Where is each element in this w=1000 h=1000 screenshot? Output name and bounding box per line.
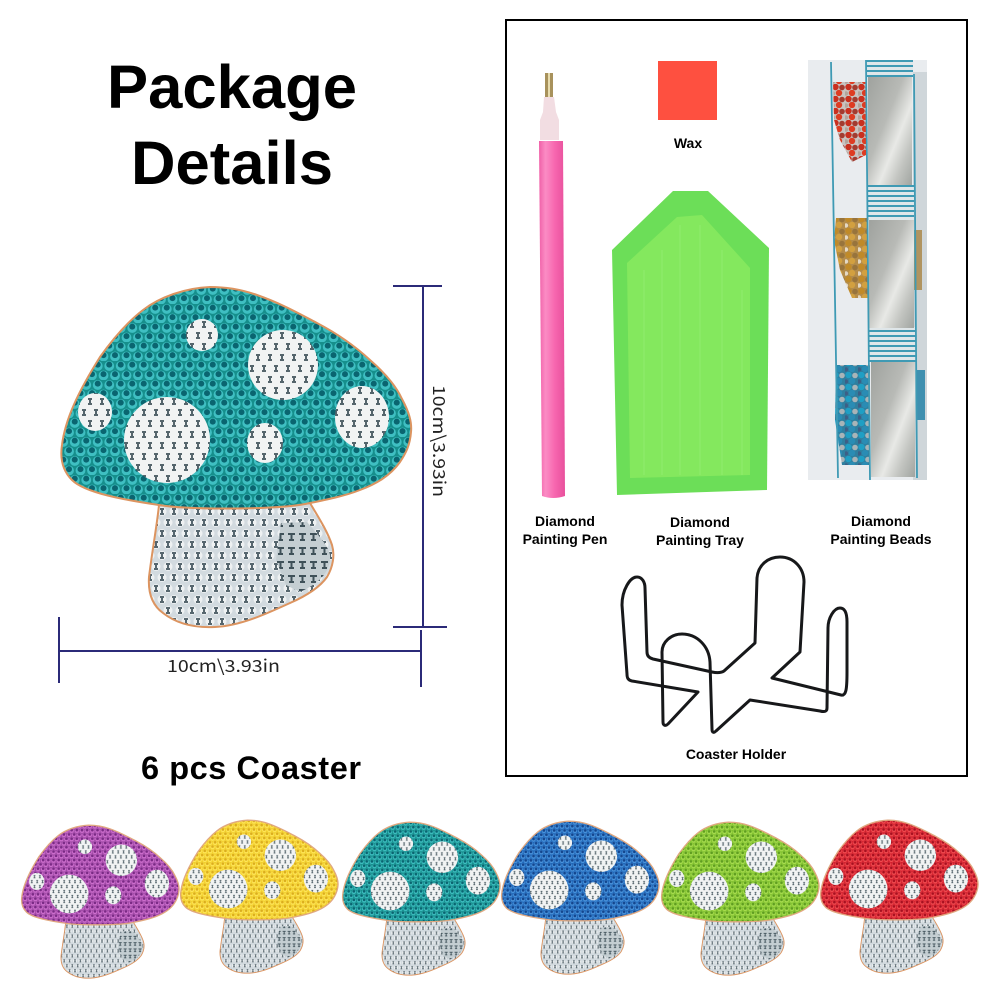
purple coaster bbox=[22, 825, 179, 978]
tray label: Painting Tray bbox=[656, 532, 744, 548]
title: Package bbox=[107, 53, 357, 122]
beads label bbox=[830, 513, 932, 547]
diamond painting pen bbox=[539, 73, 565, 498]
diamond painting tray bbox=[612, 191, 769, 495]
coaster holder bbox=[622, 557, 847, 732]
blue coaster bbox=[502, 821, 659, 974]
coaster row bbox=[22, 820, 978, 978]
tray label: Diamond bbox=[670, 514, 730, 530]
green coaster bbox=[662, 822, 819, 975]
height dimension bbox=[393, 286, 453, 627]
height dimension: 10cm\3.93in bbox=[428, 385, 453, 497]
title bbox=[107, 53, 357, 198]
large teal mushroom coaster bbox=[61, 287, 411, 627]
diamond painting beads bag bbox=[808, 60, 927, 480]
width dimension bbox=[59, 617, 421, 687]
title: Details bbox=[131, 129, 333, 198]
pen label bbox=[523, 513, 607, 547]
pen label: Painting Pen bbox=[523, 531, 607, 547]
accessories panel bbox=[506, 20, 967, 776]
tray label bbox=[656, 514, 744, 548]
wax bbox=[658, 61, 717, 120]
beads label: Painting Beads bbox=[830, 531, 932, 547]
beads label: Diamond bbox=[851, 513, 911, 529]
wax label: Wax bbox=[674, 135, 702, 151]
width dimension: 10cm\3.93in bbox=[167, 652, 280, 677]
pen label: Diamond bbox=[535, 513, 595, 529]
red coaster bbox=[821, 820, 978, 973]
yellow coaster bbox=[181, 820, 338, 973]
coaster holder label: Coaster Holder bbox=[686, 746, 787, 762]
teal coaster bbox=[343, 822, 500, 975]
coaster count heading: 6 pcs Coaster bbox=[141, 750, 361, 786]
